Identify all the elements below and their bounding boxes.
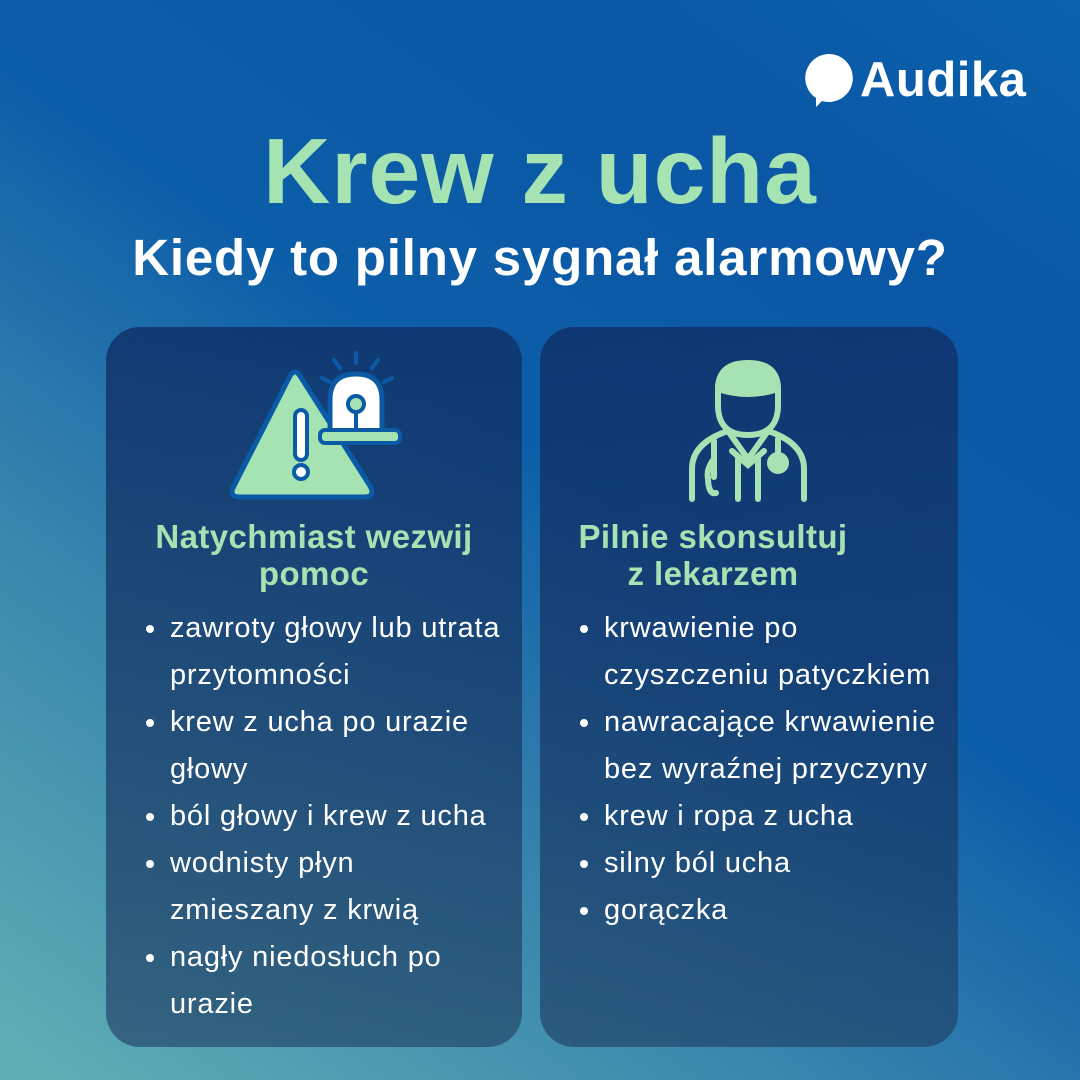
logo: Audika xyxy=(860,53,1026,107)
icon: doctor xyxy=(689,360,807,502)
list left: ból głowy i krew z ucha xyxy=(170,800,487,832)
panel: left xyxy=(106,327,522,1047)
list right xyxy=(580,612,936,926)
list right: krwawienie po xyxy=(604,612,798,644)
list right: gorączka xyxy=(604,894,728,926)
list left: wodnisty płyn xyxy=(170,847,354,879)
title: Krew z ucha xyxy=(263,119,817,223)
heading left: Natychmiast wezwij xyxy=(155,518,473,555)
list left: głowy xyxy=(170,753,248,785)
subtitle: Kiedy to pilny sygnał alarmowy? xyxy=(132,229,948,286)
heading left: pomoc xyxy=(259,555,369,592)
list right: krew i ropa z ucha xyxy=(604,800,854,832)
icon: warning with siren xyxy=(230,351,402,500)
heading right: z lekarzem xyxy=(628,555,798,592)
heading left xyxy=(155,518,473,592)
list left: przytomności xyxy=(170,659,350,691)
list left: nagły niedosłuch po xyxy=(170,941,442,973)
list right: silny ból ucha xyxy=(604,847,791,879)
heading right xyxy=(578,518,848,592)
list left: zawroty głowy lub utrata xyxy=(170,612,500,644)
heading right: Pilnie skonsultuj xyxy=(578,518,848,555)
list right: bez wyraźnej przyczyny xyxy=(604,753,928,785)
list left: urazie xyxy=(170,988,254,1020)
list left: krew z ucha po urazie xyxy=(170,706,469,738)
list left: zmieszany z krwią xyxy=(170,894,419,926)
list right: czyszczeniu patyczkiem xyxy=(604,659,931,691)
list left xyxy=(146,612,500,1020)
panel: right xyxy=(540,327,958,1047)
list right: nawracające krwawienie xyxy=(604,706,936,738)
